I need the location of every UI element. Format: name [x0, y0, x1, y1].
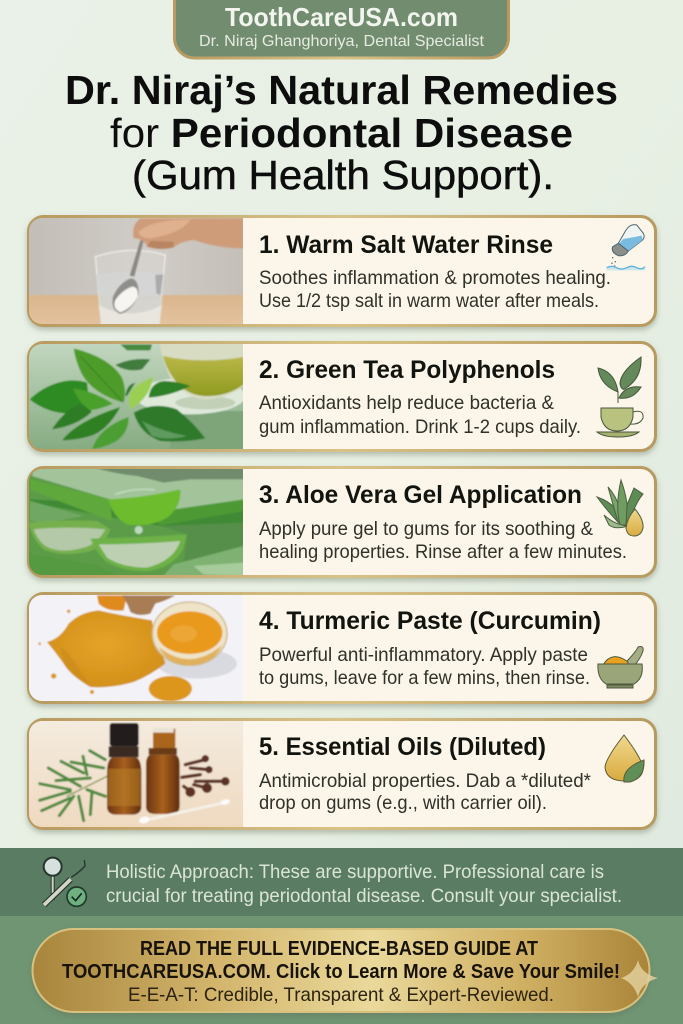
- disclaimer text: Holistic Approach: These are supportive. Professional care is: [106, 861, 604, 883]
- disclaimer text: crucial for treating periodontal disease. Consult your specialist.: [106, 885, 622, 907]
- description: [259, 267, 611, 312]
- icon: dental tools and check: [44, 858, 86, 906]
- heading: 2. Green Tea Polyphenols: [259, 356, 555, 384]
- title: Dr. Niraj’s Natural Remedies: [65, 67, 618, 113]
- header badge: [174, 0, 508, 58]
- panel: remedy 4 turmeric: [27, 592, 656, 705]
- photo: green tea leaves and cup: [27, 341, 247, 454]
- photo: turmeric powder and paste: [27, 592, 247, 705]
- call to action headline: [62, 937, 620, 983]
- title: for Periodontal Disease: [110, 110, 573, 156]
- description: Use 1/2 tsp salt in warm water after meals.: [259, 290, 599, 312]
- heading: 5. Essential Oils (Diluted): [259, 733, 546, 761]
- heading: 1. Warm Salt Water Rinse: [259, 231, 553, 259]
- photo: aloe vera slices: [27, 466, 247, 579]
- description: [259, 770, 591, 814]
- specialist name: Dr. Niraj Ghanghoriya, Dental Specialist: [199, 33, 485, 50]
- panel: remedy 3 aloe vera: [27, 466, 656, 579]
- heading: 3. Aloe Vera Gel Application: [259, 481, 582, 509]
- description: Antimicrobial properties. Dab a *diluted*: [259, 770, 591, 792]
- description: Soothes inflammation & promotes healing.: [259, 267, 611, 289]
- title: (Gum Health Support).: [132, 152, 554, 198]
- icon: tea plant and cup: [597, 357, 643, 437]
- icon: sparkle: [621, 960, 658, 997]
- photo: salt water glass: [27, 215, 247, 328]
- panel: remedy 2 green tea: [27, 341, 656, 454]
- icon: oil drop and leaf: [605, 735, 644, 782]
- icon: salt shaker: [607, 225, 645, 270]
- panel: remedy 5 essential oils: [27, 718, 656, 831]
- footer green background: [0, 916, 683, 1024]
- title: [65, 67, 618, 198]
- icon: mortar and pestle: [598, 646, 643, 688]
- call to action button: [32, 929, 658, 1012]
- description: drop on gums (e.g., with carrier oil).: [259, 792, 547, 814]
- description: [259, 518, 627, 563]
- description: [259, 392, 581, 438]
- call to action headline: READ THE FULL EVIDENCE-BASED GUIDE AT: [140, 937, 538, 960]
- E-E-A-T line: E-E-A-T: Credible, Transparent & Expert-Reviewed.: [128, 984, 554, 1006]
- icon: aloe plant and drop: [597, 480, 643, 536]
- description: gum inflammation. Drink 1-2 cups daily.: [259, 416, 581, 438]
- photo: essential oil bottles: [27, 718, 247, 831]
- disclaimer text: [106, 861, 622, 907]
- heading: 4. Turmeric Paste (Curcumin): [259, 607, 601, 635]
- brand name: ToothCareUSA.com: [225, 2, 458, 32]
- call to action headline: TOOTHCAREUSA.COM. Click to Learn More & Save Your Smile!: [62, 960, 620, 983]
- description: healing properties. Rinse after a few minutes.: [259, 541, 627, 563]
- description: Powerful anti-inflammatory. Apply paste: [259, 644, 588, 666]
- description: Antioxidants help reduce bacteria &: [259, 392, 554, 414]
- description: to gums, leave for a few mins, then rinse.: [259, 667, 590, 689]
- panel: holistic approach band: [0, 848, 683, 916]
- description: Apply pure gel to gums for its soothing &: [259, 518, 593, 540]
- description: [259, 644, 590, 689]
- panel: remedy 1 salt water: [27, 215, 656, 328]
